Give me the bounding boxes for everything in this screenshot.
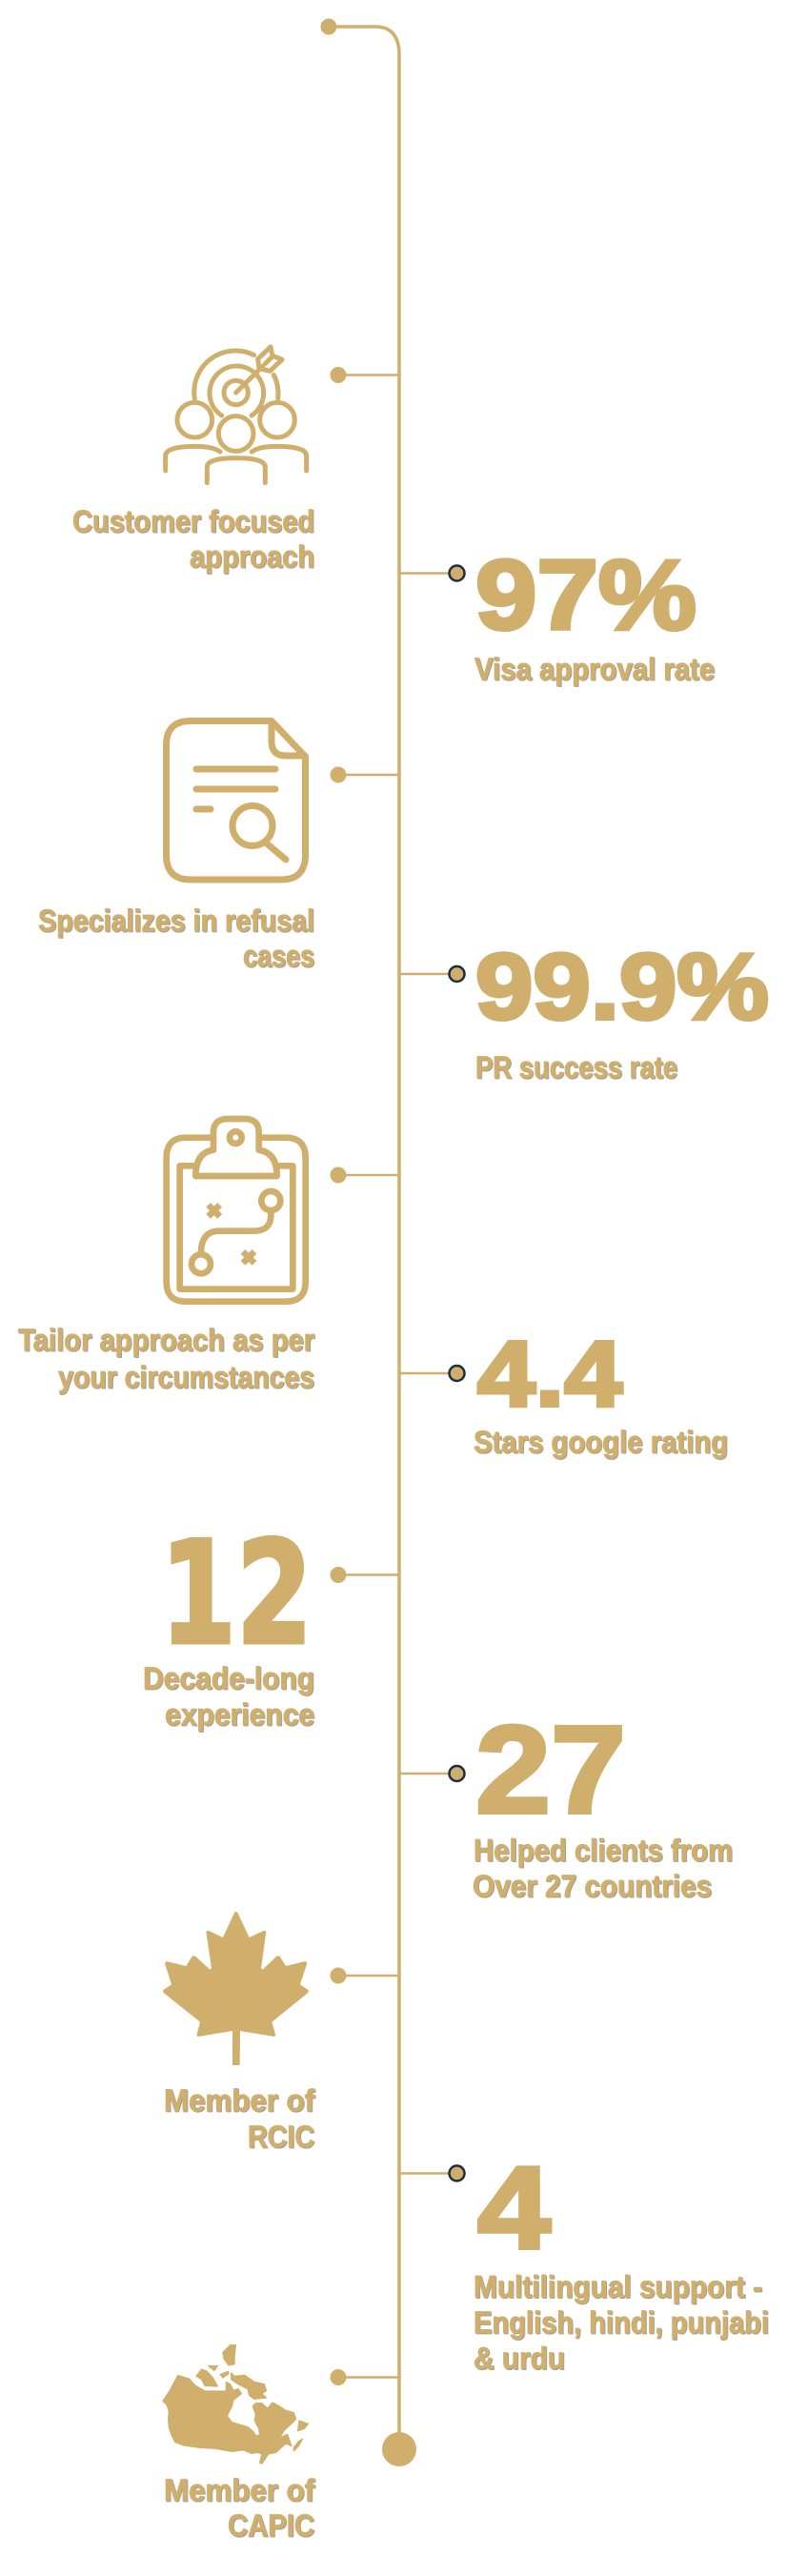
stat: 27 <box>399 1699 733 1903</box>
timeline spine <box>320 19 416 2466</box>
label: & urdu <box>474 2341 565 2375</box>
label: CAPIC <box>228 2508 314 2543</box>
label <box>474 2270 769 2375</box>
icon: maple leaf <box>163 1912 309 2065</box>
icon: target and people <box>166 347 307 483</box>
stat: 97% <box>399 540 715 686</box>
item: decade-long experience <box>143 1511 399 1732</box>
label <box>38 903 314 973</box>
item: specializes in refusal cases <box>38 720 399 973</box>
icon: map of Canada <box>163 2345 308 2464</box>
label: Over 27 countries <box>473 1869 712 1903</box>
label <box>143 1661 314 1732</box>
stat: 99.9% <box>399 934 769 1085</box>
item: tailor approach <box>18 1119 399 1394</box>
label: Multilingual support - <box>474 2270 762 2304</box>
label <box>473 1834 733 1903</box>
label: Tailor approach as per <box>18 1323 314 1357</box>
label: Helped clients from <box>474 1834 733 1868</box>
label: RCIC <box>248 2120 314 2154</box>
stat: 4.4 <box>399 1322 728 1459</box>
label <box>72 504 314 574</box>
label: Decade-long <box>143 1661 314 1695</box>
icon: document with magnifier <box>166 720 305 880</box>
label: Member of <box>164 2473 314 2507</box>
label: your circumstances <box>58 1360 314 1394</box>
label: Member of <box>164 2083 314 2118</box>
stat: 4 <box>399 2143 769 2375</box>
label <box>164 2473 314 2543</box>
label <box>164 2083 314 2154</box>
label: experience <box>165 1697 314 1732</box>
item: member of RCIC <box>163 1912 399 2154</box>
item: customer focused approach <box>72 347 399 574</box>
label: Customer focused <box>72 504 314 538</box>
number: 97% <box>475 540 696 651</box>
label: PR success rate <box>475 1050 677 1085</box>
label: Specializes in refusal <box>38 903 314 938</box>
label: cases <box>243 939 314 973</box>
number: 4.4 <box>477 1322 622 1426</box>
number: 99.9% <box>475 934 769 1039</box>
number: 27 <box>475 1699 626 1839</box>
icon: clipboard with route <box>167 1119 306 1302</box>
item: member of CAPIC <box>163 2345 399 2543</box>
number: 12 <box>160 1511 313 1677</box>
label: Visa approval rate <box>474 652 715 686</box>
label <box>18 1323 314 1394</box>
label: Stars google rating <box>474 1425 728 1459</box>
label: approach <box>190 539 314 574</box>
number: 4 <box>477 2143 551 2274</box>
